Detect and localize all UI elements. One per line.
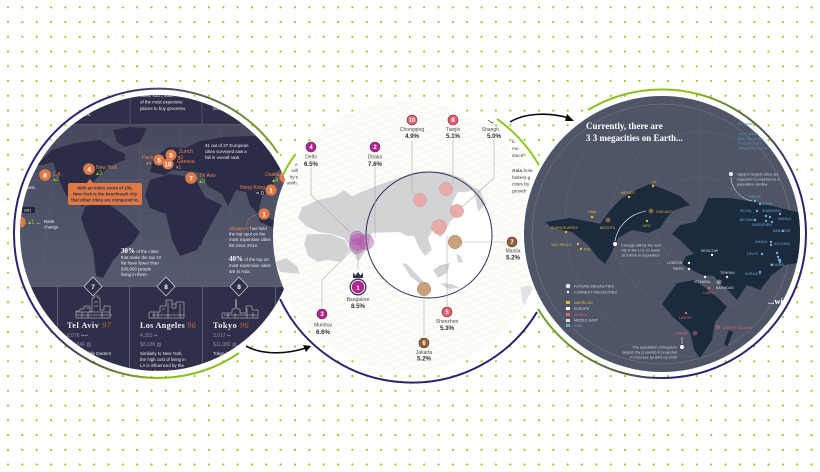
label: Delhi: 6.5% — [304, 161, 319, 168]
city labels: Europe and Middle East: LONDON — [667, 261, 683, 265]
annotation: Angola — [622, 337, 684, 360]
annotation: Japan — [729, 172, 780, 201]
column: Los Angeles: 4,353 ▪▪ — [140, 333, 158, 339]
column: Los Angeles: Similarly to New York, — [140, 351, 182, 356]
label: Shanghai: Shangh. — [482, 127, 500, 133]
text: 30 percent stat: 500,000 people — [121, 266, 152, 271]
arrow: middle to right — [510, 114, 574, 122]
column: Los Angeles: 8 — [164, 284, 168, 291]
label: Bangalore — [347, 272, 370, 310]
legend: CURRENT MEGACITIES — [574, 290, 617, 294]
world map continents — [30, 127, 296, 278]
text: 30 percent stat: that make the top 10 — [121, 255, 162, 260]
city labels: Americas: MEXICO — [621, 191, 635, 195]
city labels: Europe and Middle East: ISTANBUL — [694, 280, 711, 284]
column: Tokyo: $11,082 ▥ — [213, 342, 237, 348]
top text panel — [72, 95, 244, 125]
label: Jakarta — [416, 338, 432, 362]
top text panel: cities, such, such — [140, 93, 174, 98]
city labels: Asia: SEOUL — [740, 209, 752, 213]
column: Tel Aviv: hub, Tel Aviv's — [67, 357, 95, 362]
city markers: Europe: ▾1 — [178, 155, 184, 161]
city labels: Europe and Middle East: PARIS — [673, 267, 684, 271]
callout: New York benchmark: that other cities are compared to. — [71, 198, 139, 202]
city markers: Europe: Paris — [142, 155, 154, 161]
text: right fragment: growth — [512, 188, 527, 194]
text: urban note: affluent formation — [738, 146, 767, 150]
city labels: Americas: CHICAGO — [656, 210, 673, 214]
city labels: Asia: BEIJING — [740, 218, 754, 222]
annotation: Chicago: Chicago will be the next — [621, 244, 661, 248]
city labels: Europe and Middle East: MOSCOW — [701, 249, 719, 253]
text: left fragment: ity's — [290, 174, 299, 180]
text: Singapore: Singapore has held — [229, 226, 267, 231]
city marker: Singapore — [247, 208, 270, 226]
column: Tel Aviv: Israel's Middle Eastern — [67, 351, 111, 356]
city labels: Africa — [674, 287, 752, 336]
text: 40 percent stat: 40% of the top 10 — [229, 255, 269, 263]
city labels: Europe and Middle East: BAGHDAD — [716, 286, 734, 290]
label: Delhi — [304, 142, 319, 168]
top text panel: places to buy groceries. — [140, 106, 186, 111]
map annotation: European cities: 31 out of 37 European — [205, 143, 248, 148]
column: Tokyo — [213, 277, 258, 356]
city marker: Hong Kong: Hong Kong — [240, 185, 265, 191]
text: continuation: ...wi — [768, 296, 784, 306]
text: left fragment: will — [291, 168, 298, 174]
top text panel: cities. — [80, 112, 91, 117]
column: Los Angeles: the high cost of living in — [140, 357, 186, 362]
label: Chongqing — [400, 115, 424, 140]
city labels: Asia: SHANGHAI — [762, 209, 781, 213]
bubbles: growth rates — [349, 182, 464, 296]
label: Manila: 5.2% — [506, 254, 521, 262]
legend: rank change: e rank. — [22, 185, 36, 190]
city markers: Europe: Geneva — [177, 159, 195, 165]
annotation: Chicago: 10 million in population — [621, 254, 660, 258]
column: Tokyo: Tokyo 96 — [213, 321, 250, 330]
city labels: Americas: RIO — [584, 248, 591, 252]
city markers: Europe — [142, 149, 195, 171]
column: Los Angeles: Los Angeles 96 — [140, 321, 197, 330]
label: Shenzhen: Shenzhen — [436, 319, 458, 325]
legend: AMERICAS — [574, 301, 593, 305]
legend: EUROPE — [574, 307, 590, 311]
city labels: Americas — [551, 180, 673, 252]
title: Currently, there are — [586, 121, 663, 131]
label: Delhi: 4 — [309, 145, 313, 151]
label: Dhaka: 2 — [373, 145, 377, 151]
callout: New York benchmark — [68, 179, 142, 205]
legend: FUTURE MEGACITIES — [574, 284, 614, 288]
middle circle ring — [280, 119, 540, 383]
panel: middle circle, megacity growth map — [273, 101, 543, 371]
bottom panel dividers — [30, 286, 283, 368]
label: Tianjin: 8 — [451, 118, 455, 124]
city labels: Americas: LIMA — [588, 210, 597, 214]
city labels: Americas: BUENOS AIRES — [551, 226, 578, 230]
city labels: Asia: SHENZHEN — [752, 223, 772, 227]
text: right fragment: cities by — [512, 182, 530, 188]
arrow: left to middle — [246, 345, 311, 353]
city marker: New York — [83, 163, 118, 175]
city labels: Africa: CAIRO — [703, 291, 715, 295]
annotation: Angola: largest city (Luanda) is projected — [622, 350, 677, 354]
city marker: L.A.: ▴2 — [53, 177, 60, 183]
label: Mumbai — [314, 309, 332, 336]
label: Tianjin: Tianjin — [446, 127, 460, 133]
label: Bangalore: Bangalore — [347, 297, 370, 303]
city labels: Asia: DHAKA — [755, 240, 768, 244]
city labels: Asia: KOLKATA — [774, 242, 791, 246]
city labels: Asia: MANILA — [778, 217, 792, 221]
legend: rank change: change — [44, 224, 59, 230]
annotation: Japan: Japan's largest cities are — [737, 172, 779, 176]
text: right fragment: fastest-g — [512, 175, 531, 181]
city markers: Europe: 5 — [169, 152, 173, 160]
label: Bangalore: 1 — [356, 286, 360, 292]
city labels: Americas: BOGOTA — [600, 226, 616, 230]
grey land map — [276, 172, 532, 306]
text: right fragment: me. — [512, 147, 520, 152]
city markers: Europe: ▾1 — [176, 165, 182, 171]
dark land map — [545, 184, 805, 358]
annotation: Japan: population decline — [737, 182, 768, 186]
text: Singapore: most expensive cities — [229, 237, 272, 242]
panel: left circle, most expensive cities — [20, 94, 286, 376]
top text panel: of the most expensive — [140, 100, 183, 104]
column: Los Angeles: strong demand for — [140, 369, 176, 374]
city marker: Tel Aviv: Tel Aviv — [199, 173, 216, 179]
top text panel: currently. — [213, 106, 231, 111]
city marker: New York: ▴3 — [96, 171, 103, 177]
label: Chongqing: 4.9% — [405, 133, 420, 140]
city marker: Osaka: Osaka — [265, 172, 280, 178]
text: left fragment: A — [295, 163, 298, 168]
text: left fragment: owth. — [287, 181, 298, 187]
city marker: New York: 4 — [87, 166, 91, 174]
text: 30 percent stat: 30% of the cities — [121, 247, 158, 255]
city labels: Asia: TOKYO — [748, 195, 761, 199]
city labels: Americas: NYC — [643, 224, 651, 228]
city labels: Africa: LUANDA — [674, 332, 689, 336]
city marker: New York: New York — [96, 165, 118, 171]
city labels: Europe and Middle East: TEHRAN — [720, 271, 735, 275]
text: right fragment: stack' — [512, 153, 524, 159]
city labels: Asia: KARACHI — [745, 272, 761, 276]
label: Jakarta: Jakarta — [416, 350, 432, 356]
text: right fragment: Asia — [512, 168, 522, 174]
label: Mumbai: 3 — [320, 312, 324, 318]
legend: AFRICA — [574, 313, 588, 317]
city marker: Hong Kong: 1 — [269, 188, 273, 194]
column: Tel Aviv — [67, 276, 112, 355]
annotation: Angola: to increase by 68% by 2035 — [630, 356, 677, 360]
text: 40 percent stat: most expensive cities — [229, 263, 272, 268]
label: Chongqing: 10 — [409, 118, 416, 124]
city marker: Tel Aviv — [185, 172, 216, 185]
city markers: Europe: Zurich — [179, 149, 193, 155]
city labels: Asia: MUMBAI — [770, 263, 784, 267]
city marker: L.A.: 8 — [43, 172, 47, 180]
city labels: Asia — [740, 195, 792, 276]
city marker: Tel Aviv: 7 — [189, 176, 193, 182]
label: Manila: 7 — [510, 240, 514, 246]
label: Manila — [506, 237, 521, 262]
city marker: Tel Aviv: ▴3 — [199, 179, 206, 185]
panel: right circle, megacities map — [521, 94, 800, 375]
left circle ring — [14, 89, 278, 378]
city marker: Osaka: ▴4 — [272, 178, 279, 184]
legend — [566, 284, 617, 328]
city marker: Osaka — [265, 172, 286, 182]
connector lines — [311, 140, 505, 336]
text: 40 percent stat: are in Asia. — [229, 269, 251, 274]
city labels: Americas: LA — [652, 180, 657, 184]
city labels: Asia: DELHI — [747, 252, 758, 256]
label: Tianjin — [446, 115, 461, 140]
legend: rank change: ▴1 — [28, 220, 35, 226]
text: right fragment: b. — [512, 140, 516, 145]
label: Shanghai — [482, 120, 502, 140]
label: Manila: Manila — [506, 248, 521, 254]
map annotation: European cities: cities surveyed saw a — [205, 149, 247, 154]
city marker: L.A. — [39, 169, 62, 181]
column: Tel Aviv: 8,076 ▪▪▪▪ — [67, 333, 88, 339]
city labels: Europe and Middle East — [667, 249, 735, 290]
text: 30 percent stat: list have fewer than — [121, 261, 159, 266]
text: urban note: more million — [738, 132, 758, 136]
column: Tokyo: Tokyo has — [213, 351, 234, 356]
title: 3 3 megacities on Earth... — [586, 133, 683, 143]
column: Tel Aviv: 7 — [91, 284, 95, 291]
column: Tel Aviv: economic growth — [67, 363, 101, 368]
legend: rank change: Rank — [44, 219, 54, 224]
text: urban note: after the urbani — [738, 137, 764, 141]
label: Chongqing: Chongqing — [400, 127, 424, 133]
callout: New York benchmark: New York is the benchmark city — [73, 192, 138, 196]
label: Tianjin: 5.1% — [446, 133, 461, 140]
text: Singapore: the top spot on the — [229, 232, 266, 237]
column: Los Angeles — [140, 277, 197, 374]
label: Jakarta: 6 — [422, 341, 426, 347]
label: Delhi: Delhi — [305, 154, 317, 160]
column: Tel Aviv: $12,546 ▥ — [67, 342, 91, 348]
column: Los Angeles: $8,035 ▥ — [140, 342, 162, 348]
city marker: L.A.: L.A. — [53, 172, 62, 178]
column: Tokyo: 3,017 ▪▪ — [213, 333, 231, 339]
text: urban note: An urban — [738, 122, 753, 126]
column: Los Angeles: LA is influenced by the — [140, 363, 184, 368]
label: Shenzhen — [436, 307, 458, 332]
text: right fragment: hola — [522, 168, 533, 174]
top text panel: arth — [88, 99, 96, 104]
label: Jakarta: 5.2% — [417, 356, 432, 362]
label: Mumbai: Mumbai — [314, 322, 332, 328]
legend: ASIA — [574, 324, 583, 328]
right circle ring — [538, 90, 806, 378]
label: Mumbai: 6.6% — [316, 329, 331, 336]
city labels: Africa: LAGOS — [679, 316, 692, 320]
text: 30 percent stat: living in them. — [121, 272, 148, 277]
city labels: Asia: BANGKOK — [773, 229, 791, 233]
legend: rank change — [20, 186, 58, 230]
legend: rank change: ← — [36, 220, 42, 226]
column: Tel Aviv: Tel Aviv 97 — [67, 321, 112, 330]
city markers: Europe: 10 — [164, 162, 172, 168]
city marker: Hong Kong — [240, 184, 277, 197]
city markers: Europe: 5 — [157, 158, 161, 164]
label: Shanghai: 5.0% — [487, 133, 502, 140]
label: Shenzhen: 5.3% — [440, 325, 455, 332]
city markers: Europe: ▾4 — [146, 161, 152, 167]
label: Shenzhen: 5 — [445, 310, 449, 316]
legend: MIDDLE EAST — [574, 318, 599, 322]
label: Dhaka: Dhaka — [368, 154, 382, 160]
callout: New York benchmark: With an index score of 100, — [77, 186, 133, 190]
column: Tokyo: 8 — [237, 284, 241, 291]
annotation: Angola: The population of Angola's — [632, 346, 677, 350]
city marker: Hong Kong: = 0 — [256, 191, 264, 197]
map annotation: European cities: fall in overall rank. — [205, 155, 240, 160]
city labels: Americas: SAO PAULO — [551, 243, 572, 247]
legend: rank change: 2021 — [24, 208, 31, 212]
annotation: Chicago — [613, 211, 662, 258]
text: urban note: in country and — [738, 142, 762, 146]
label: Dhaka — [368, 142, 383, 168]
label: Dhaka: 7.6% — [368, 161, 383, 168]
city labels: Africa: DAR ES SALAAM — [723, 326, 752, 330]
annotation: Japan: expected to experience a — [737, 178, 780, 182]
label: Bangalore: 8.5% — [351, 303, 366, 310]
text: Singapore: list since 2014. — [229, 243, 258, 248]
annotation: Chicago: city in the U.S. to reach — [621, 248, 660, 252]
city labels: Asia: OSAKA — [760, 202, 773, 206]
city marker: Singapore: 1 — [262, 212, 266, 218]
